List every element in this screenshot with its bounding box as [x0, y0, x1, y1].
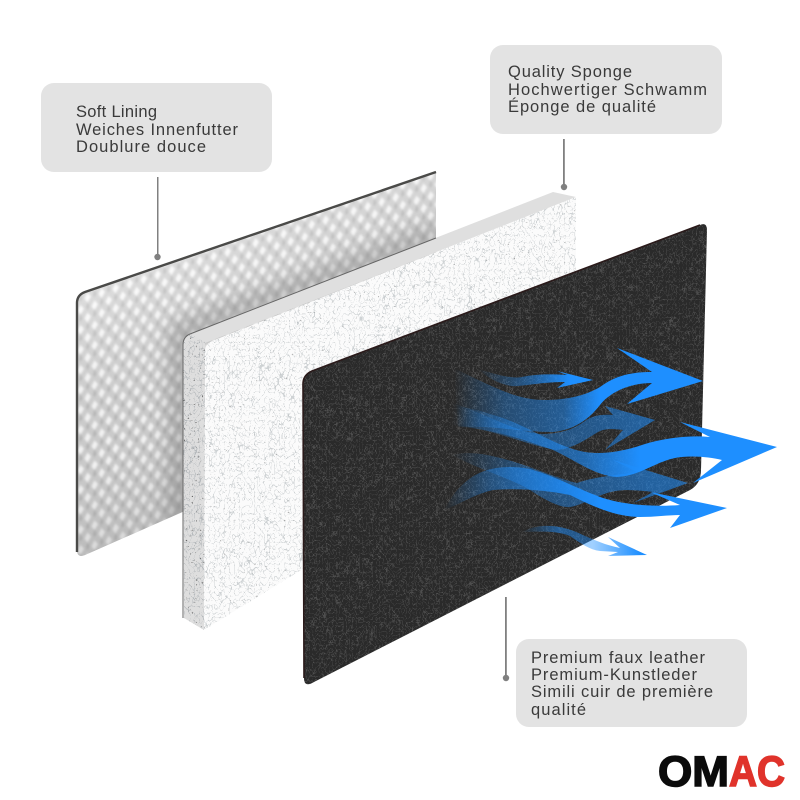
label: premium faux leather text: qualité: [531, 701, 586, 719]
callout: quality sponge: [490, 45, 722, 134]
label: soft lining text: [76, 103, 238, 156]
sponge side face: [184, 334, 205, 630]
leader line: premium faux leather: [503, 597, 509, 681]
callout: soft lining: [41, 83, 272, 172]
label: soft lining text: Soft Lining: [76, 103, 157, 121]
arrow: top small: [478, 369, 593, 388]
label: quality sponge text: [508, 63, 707, 116]
label: premium faux leather text: Premium-Kunstleder: [531, 666, 698, 684]
arrow: long middle: [457, 407, 777, 483]
sponge front face: [200, 190, 580, 635]
logo: OMAC: AC: [729, 748, 785, 796]
layer: quality sponge panel: [180, 190, 580, 635]
leader line: quality sponge: [561, 139, 567, 190]
label: premium faux leather text: Simili cuir de première: [531, 683, 713, 701]
label: quality sponge text: Quality Sponge: [508, 63, 632, 81]
logo: OMAC: [658, 748, 785, 796]
label: premium faux leather text: [531, 649, 713, 719]
label: soft lining text: Weiches Innenfutter: [76, 121, 238, 139]
callout: premium faux leather: [516, 639, 747, 727]
label: soft lining text: Doublure douce: [76, 138, 206, 156]
airflow arrows: [444, 348, 777, 556]
arrow: top large: [453, 348, 703, 432]
leader line: soft lining: [154, 177, 161, 260]
layer: soft lining panel: [70, 165, 440, 565]
label: premium faux leather text: Premium faux leather: [531, 649, 706, 667]
label: quality sponge text: Éponge de qualité: [508, 97, 656, 116]
arrow: lower long: [444, 467, 727, 528]
arrow: mid upper, behind: [450, 402, 655, 450]
sponge top face: [183, 192, 576, 345]
arrow: bottom small: [522, 526, 647, 556]
label: quality sponge text: Hochwertiger Schwamm: [508, 81, 707, 99]
arrow: mid lower, behind: [452, 453, 688, 507]
layer: faux leather panel: [300, 220, 710, 690]
logo: OMAC: OM: [658, 748, 729, 796]
